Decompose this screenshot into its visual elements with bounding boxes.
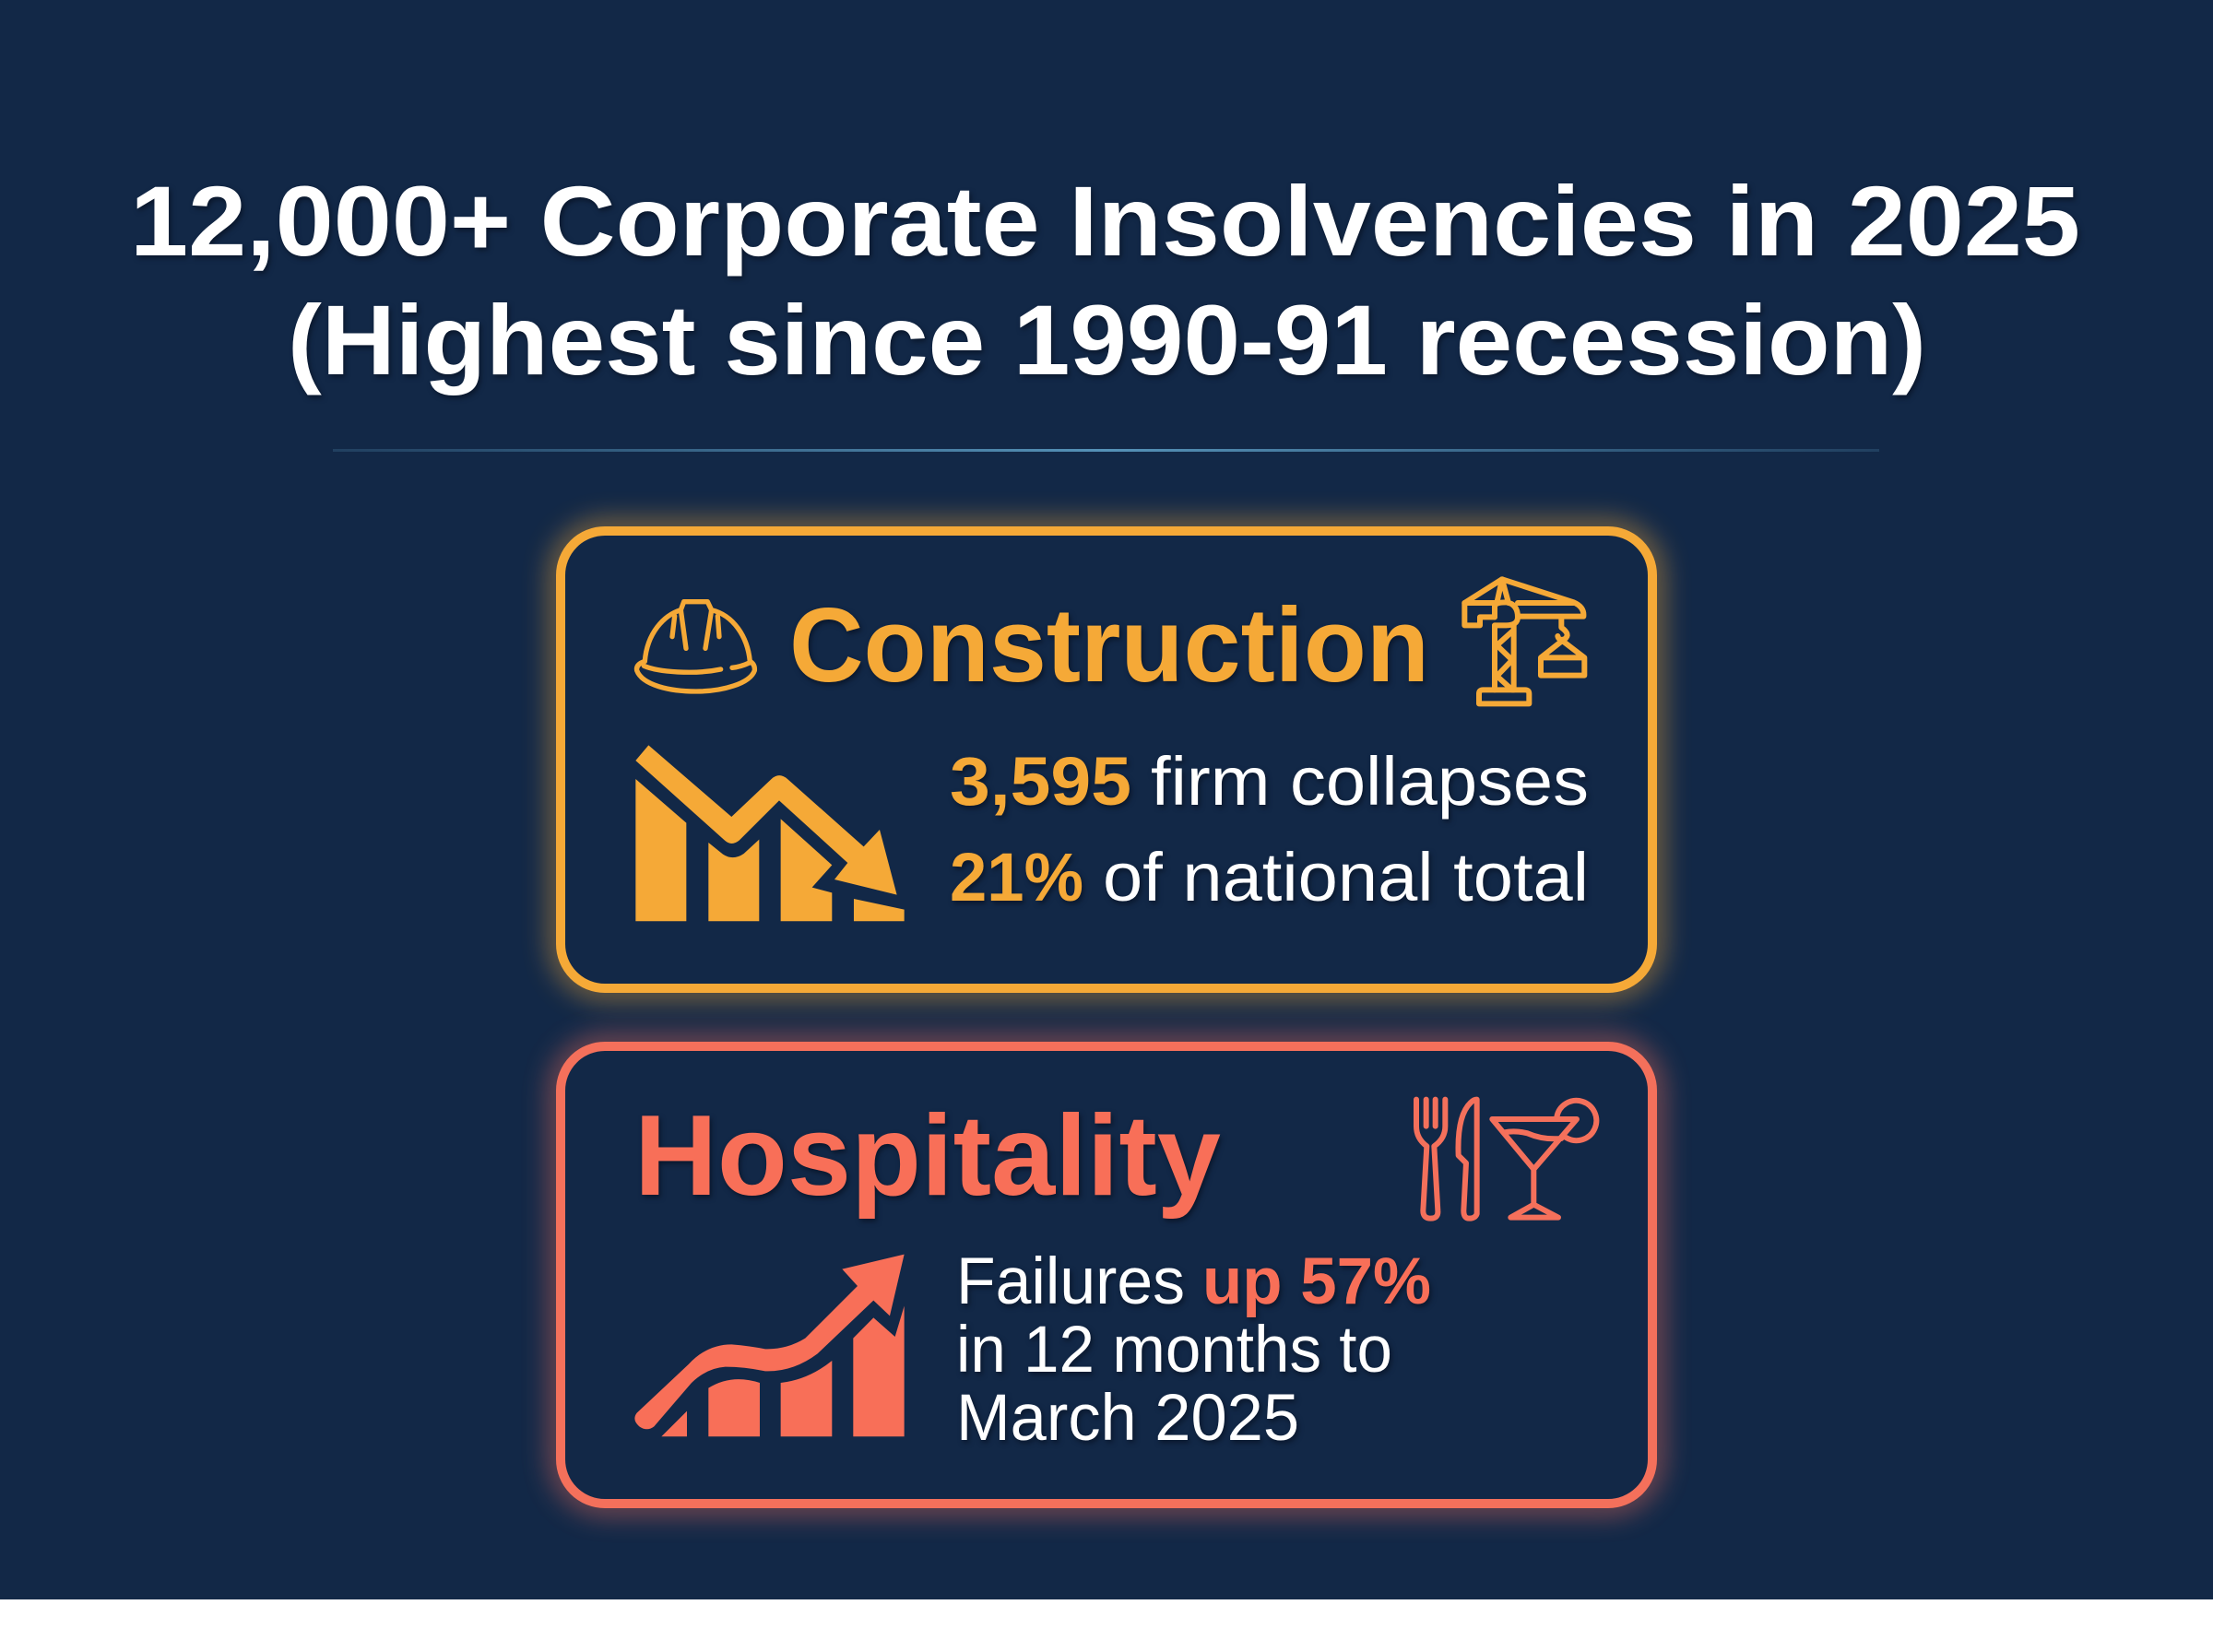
icon: hard hat (637, 602, 754, 691)
icon: falling bar chart (635, 745, 905, 921)
down arrow (635, 745, 897, 895)
card glow (561, 1046, 1652, 1504)
title line 1: 12,000+ Corporate Insolvencies in 2025 (130, 165, 2080, 277)
label: in 12 months to: in 12 months to (956, 1314, 1392, 1386)
stat: 21%: 21% (950, 839, 1083, 915)
cocktail glass (1492, 1119, 1577, 1218)
stats: construction (950, 743, 1589, 915)
card border (561, 531, 1652, 988)
label: firm collapses: firm collapses (1151, 743, 1589, 820)
label: of national total: of national total (1103, 839, 1589, 915)
declining bars (635, 779, 905, 921)
panel: construction (561, 531, 1652, 988)
divider (333, 449, 1879, 452)
card border (561, 1046, 1652, 1504)
card glow (561, 531, 1652, 988)
stats: hospitality (956, 1245, 1431, 1455)
stat: 3,595: 3,595 (950, 743, 1131, 820)
fork (1416, 1100, 1445, 1219)
label: March 2025: March 2025 (956, 1382, 1299, 1455)
stat: up 57%: up 57% (1202, 1245, 1431, 1318)
knife (1458, 1100, 1477, 1219)
heading: construction: Construction (789, 587, 1429, 704)
label: failures: Failures (956, 1245, 1185, 1318)
title (130, 165, 2080, 395)
lime slice (1556, 1101, 1596, 1140)
icon: rising bar chart (634, 1255, 905, 1436)
title line 2: (Highest since 1990-91 recession) (288, 284, 1926, 395)
up arrow (634, 1255, 905, 1429)
icon: tower crane (1464, 579, 1584, 703)
panel: hospitality (561, 1046, 1652, 1504)
rising bars (661, 1306, 905, 1436)
heading: hospitality: Hospitality (634, 1092, 1221, 1220)
icon: cutlery and cocktail (1416, 1100, 1596, 1219)
